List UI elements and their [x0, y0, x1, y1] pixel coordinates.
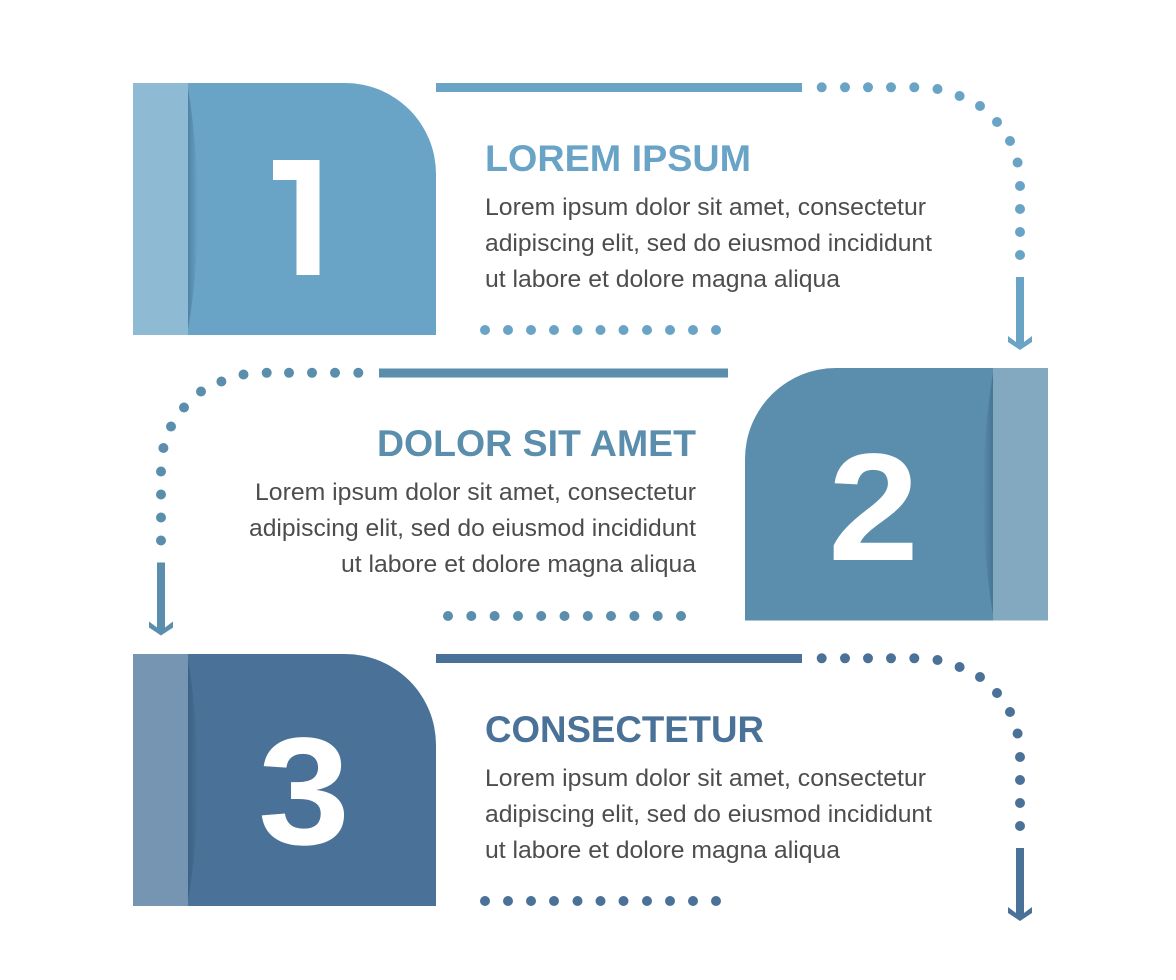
- panel: step 2: [149, 368, 1048, 636]
- dotted divider 3: [480, 896, 721, 906]
- connector bar 2: [379, 368, 728, 378]
- body text 3: adipiscing elit, sed do eiusmod incididunt: [485, 801, 932, 828]
- body text 3: Lorem ipsum dolor sit amet, consectetur: [485, 765, 926, 792]
- number block 3: [133, 654, 436, 906]
- dotted divider 2: [443, 611, 686, 621]
- heading 3: CONSECTETUR: [485, 709, 764, 750]
- body text 1: [485, 194, 932, 293]
- panel: step 1: [133, 82, 1032, 350]
- heading 2: DOLOR SIT AMET: [377, 423, 696, 464]
- panel: step 3: [133, 653, 1032, 921]
- body text 3: ut labore et dolore magna aliqua: [485, 837, 840, 864]
- body text 1: Lorem ipsum dolor sit amet, consectetur: [485, 194, 926, 221]
- body text 2: Lorem ipsum dolor sit amet, consectetur: [255, 479, 696, 506]
- number block 1: [133, 83, 436, 335]
- body text 1: adipiscing elit, sed do eiusmod incididunt: [485, 230, 932, 257]
- body text 1: ut labore et dolore magna aliqua: [485, 266, 840, 293]
- body text 2: adipiscing elit, sed do eiusmod incididunt: [249, 515, 696, 542]
- number block 2: [745, 368, 1048, 620]
- body text 3: [485, 765, 932, 864]
- heading 1: LOREM IPSUM: [485, 138, 751, 179]
- connector bar 1: [436, 83, 802, 92]
- number block 1: 1: [258, 137, 350, 308]
- number block 2: 2: [828, 422, 919, 593]
- dotted curve and arrow 2: [149, 368, 363, 636]
- connector bar 3: [436, 654, 802, 663]
- dotted curve and arrow 1: [817, 82, 1032, 350]
- dotted curve and arrow 3: [817, 653, 1032, 921]
- dotted divider 1: [480, 325, 721, 335]
- body text 2: [249, 479, 696, 578]
- body text 2: ut labore et dolore magna aliqua: [341, 551, 696, 578]
- number block 3: 3: [258, 706, 350, 877]
